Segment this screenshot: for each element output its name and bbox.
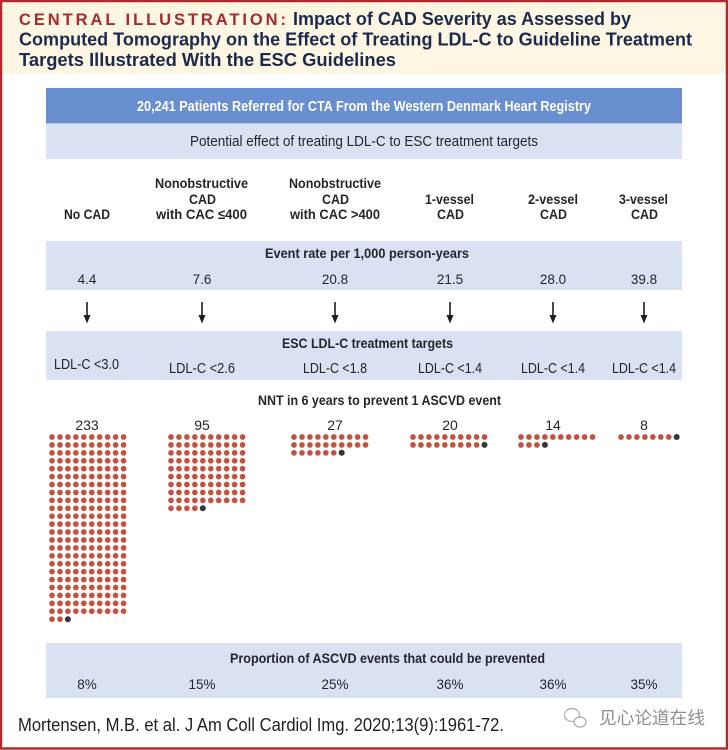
- subtitle band: [46, 124, 682, 159]
- NNT heading: NNT in 6 years to prevent 1 ASCVD event: [258, 392, 501, 408]
- NNT numbers: 14: [545, 417, 561, 433]
- ESC targets band: LDL-C <1.4: [521, 361, 585, 377]
- dot grid: NNT 14: [518, 434, 598, 449]
- column headers: 2-vessel: [528, 191, 578, 207]
- column headers: CAD: [540, 206, 567, 222]
- prevented proportion band: 8%: [77, 677, 97, 692]
- title banner: Computed Tomography on the Effect of Treating LDL-C to Guideline Treatment: [19, 30, 692, 50]
- prevented proportion band: 36%: [539, 677, 567, 692]
- event rate band: 20.8: [322, 272, 348, 287]
- column headers: CAD: [437, 206, 464, 222]
- title banner: CENTRAL ILLUSTRATION:: [19, 11, 286, 29]
- ESC targets band: [46, 331, 682, 380]
- event rate band: 21.5: [437, 272, 463, 287]
- subtitle band: Potential effect of treating LDL-C to ESC treatment targets: [190, 133, 538, 150]
- event rate band: 28.0: [540, 272, 566, 287]
- NNT numbers: 233: [75, 417, 99, 433]
- citation: Mortensen, M.B. et al. J Am Coll Cardiol Img. 2020;13(9):1961-72.: [18, 715, 504, 735]
- NNT numbers: [75, 417, 648, 433]
- column headers: No CAD: [64, 206, 110, 222]
- ESC targets band: LDL-C <3.0: [54, 357, 119, 373]
- ESC targets band: LDL-C <1.4: [418, 361, 482, 377]
- arrows: [83, 302, 647, 324]
- column headers: CAD: [322, 191, 349, 207]
- dot grid: NNT 95: [168, 434, 248, 512]
- patient cohort band: [46, 88, 682, 124]
- event rate band: [46, 241, 682, 290]
- column headers: Nonobstructive: [289, 175, 381, 191]
- dot grid: NNT 27: [291, 434, 370, 457]
- column headers: 1-vessel: [425, 191, 474, 207]
- column headers: 3-vessel: [619, 191, 668, 207]
- prevented proportion band: [46, 643, 682, 698]
- column headers: CAD: [631, 206, 658, 222]
- title banner: [2, 2, 726, 74]
- dot grid: NNT 233: [49, 434, 128, 623]
- ESC targets band: ESC LDL-C treatment targets: [282, 335, 453, 351]
- prevented proportion band: Proportion of ASCVD events that could be prevented: [230, 650, 545, 666]
- prevented proportion band: 35%: [630, 677, 658, 692]
- ESC targets band: LDL-C <1.8: [303, 361, 367, 377]
- NNT numbers: 20: [442, 417, 458, 433]
- column headers: CAD: [189, 191, 216, 207]
- title banner: Impact of CAD Severity as Assessed by: [293, 9, 631, 29]
- dot grid: NNT 20: [410, 434, 490, 449]
- column headers: Nonobstructive: [155, 175, 248, 191]
- event rate band: 39.8: [631, 272, 657, 287]
- watermark: 见心论道在线: [599, 708, 705, 728]
- dot grid: NNT 8: [618, 434, 680, 441]
- prevented proportion band: 15%: [188, 677, 216, 692]
- event rate band: Event rate per 1,000 person-years: [265, 245, 469, 261]
- column headers: [64, 175, 668, 222]
- NNT numbers: 8: [640, 417, 648, 433]
- NNT numbers: 95: [194, 417, 210, 433]
- title banner: Targets Illustrated With the ESC Guidelines: [19, 50, 396, 70]
- event rate band: 7.6: [193, 272, 211, 287]
- NNT numbers: 27: [327, 417, 343, 433]
- prevented proportion band: 25%: [321, 677, 349, 692]
- ESC targets band: LDL-C <1.4: [612, 361, 676, 377]
- column headers: with CAC ≤400: [155, 206, 247, 222]
- column headers: with CAC >400: [289, 206, 380, 222]
- event rate band: 4.4: [78, 272, 97, 287]
- patient cohort band: 20,241 Patients Referred for CTA From the Western Denmark Heart Registry: [137, 98, 592, 115]
- prevented proportion band: 36%: [436, 677, 464, 692]
- ESC targets band: LDL-C <2.6: [169, 361, 235, 377]
